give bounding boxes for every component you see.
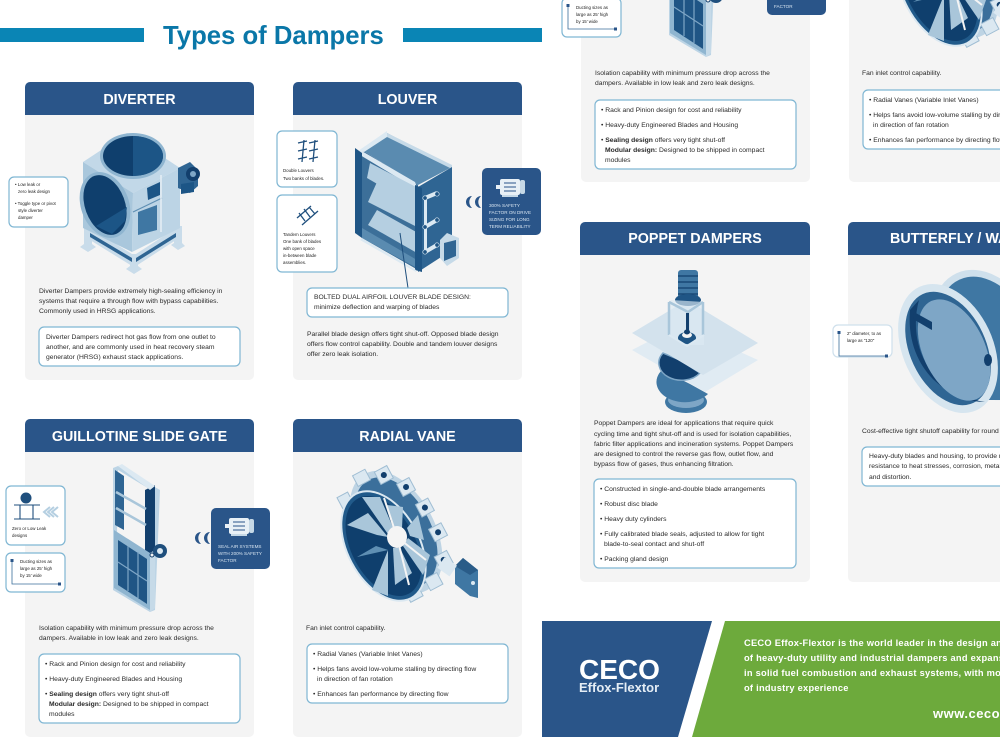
header: guillotine: GUILLOTINE SLIDE GATE	[52, 429, 227, 445]
callout: seal air systems	[195, 508, 270, 569]
footer: logo block: Effox-Flextor	[579, 680, 659, 695]
title with side bars	[0, 22, 542, 50]
callout: ducting size	[6, 553, 65, 592]
header: butterfly	[848, 222, 1000, 255]
callout: ducting size: Ducting sizes as	[20, 559, 53, 564]
text box: poppet features: • Heavy duty cylinders	[600, 516, 667, 523]
callout: bolted blade design: minimize deflection and warping of blades	[314, 304, 440, 311]
text: louver description	[307, 331, 499, 358]
text: radial vane description: Fan inlet control capability.	[306, 625, 386, 632]
callout: diverter features: damper	[18, 215, 33, 220]
text box: guillotine features (repeat): • Sealing design offers very tight shut-off	[601, 137, 725, 144]
text box: poppet features: blade-to-seal contact and shut-off	[604, 541, 704, 548]
text: diverter description: systems that require a through flow with bypass capabilities.	[39, 298, 218, 305]
text box: radial vane features: in direction of fan rotation	[317, 676, 393, 683]
callout: bolted blade design	[307, 288, 508, 317]
header: diverter	[25, 82, 254, 115]
callout: safety factor	[466, 168, 541, 235]
text box: butterfly notes	[862, 447, 1000, 486]
panel: guillotine slide gate (upper right, cropped)	[562, 0, 826, 182]
title with side bars: Types of Dampers	[163, 22, 384, 50]
text box: butterfly notes: and distortion.	[869, 474, 912, 481]
header: radial vane: RADIAL VANE	[359, 429, 456, 445]
text: guillotine description: Isolation capability with minimum pressure drop across the	[39, 625, 214, 632]
callout: double louvers: Double Louvers	[283, 168, 315, 173]
callout: diverter features	[9, 177, 68, 227]
text box: guillotine features: Modular design: Designed to be shipped in compact	[49, 701, 209, 708]
text box: radial vane features: • Enhances fan performance by directing flow	[313, 691, 449, 698]
text box: guillotine features	[39, 654, 240, 723]
panel: guillotine slide gate	[6, 419, 270, 737]
panel: louver	[277, 82, 541, 380]
illustration: slide gate (cropped)	[669, 0, 723, 57]
text box: diverter notes: another, and are commonly used in heat recovery steam	[46, 344, 215, 351]
callout: diameter range: 2" diameter, to as	[847, 331, 882, 336]
text box: guillotine features: • Heavy-duty Engineered Blades and Housing	[45, 676, 182, 683]
text: diverter description: Commonly used in HRSG applications.	[39, 308, 156, 315]
text: diverter description	[39, 288, 223, 315]
text box: radial vane features (repeat): in direction of fan rotation	[873, 122, 949, 129]
text box: guillotine features (repeat): • Rack and Pinion design for cost and reliability	[601, 107, 742, 114]
text box: poppet features: • Robust disc blade	[600, 501, 658, 508]
header: poppet dampers	[580, 222, 810, 255]
text: diverter description: Diverter Dampers provide extremely high-sealing efficiency in	[39, 288, 223, 295]
callout: zero or low leak: Zero or Low Leak	[12, 526, 47, 531]
callout: seal air systems: SEAL AIR SYSTEMS	[218, 544, 262, 549]
footer: company description: of industry experience	[744, 683, 849, 693]
illustration: radial vane (cropped)	[879, 0, 1000, 61]
panel: poppet dampers	[580, 222, 810, 582]
callout: diverter features: • Toggle type or pivot	[15, 201, 57, 206]
callout: tandem louvers: with open space	[283, 246, 315, 251]
callout: seal air systems: WITH 200% SAFETY	[218, 551, 262, 556]
text: guillotine description	[39, 625, 214, 642]
illustration: radial vane	[323, 450, 478, 616]
panel: radial vane (upper right, cropped)	[849, 0, 1000, 182]
text box: radial vane features	[307, 644, 508, 703]
text box: guillotine features (repeat): • Heavy-duty Engineered Blades and Housing	[601, 122, 738, 129]
callout: zero or low leak	[6, 486, 65, 545]
illustration: butterfly damper	[878, 252, 1000, 429]
text: guillotine description (repeat)	[595, 70, 770, 87]
callout: seal air systems: FACTOR	[218, 558, 237, 563]
header: guillotine	[25, 419, 254, 452]
header: louver	[293, 82, 522, 115]
text: louver description: offers flow control capability. Double and tandem louver designs	[307, 341, 498, 348]
text box: guillotine features (repeat)	[595, 100, 796, 169]
illustration: diverter damper	[71, 133, 200, 274]
callout: ducting size (cropped): Ducting sizes as	[576, 5, 609, 10]
text box: guillotine features: modules	[49, 711, 75, 718]
text: guillotine description: dampers. Available in low leak and zero leak designs.	[39, 635, 199, 642]
text: poppet description: are designed to control the reverse gas flow, outlet flow, and	[594, 451, 774, 458]
callout: ducting size (cropped): by 15' wide	[576, 19, 598, 24]
header: radial vane	[293, 419, 522, 452]
callout: safety factor: SIZING FOR LONG	[489, 217, 530, 222]
text box: guillotine features: • Sealing design offers very tight shut-off	[45, 691, 169, 698]
text: guillotine description (repeat): dampers. Available in low leak and zero leak designs.	[595, 80, 755, 87]
callout: ducting size (cropped)	[562, 0, 621, 37]
callout: tandem louvers	[277, 195, 337, 272]
text: poppet description	[594, 420, 794, 468]
text box: diverter notes	[39, 327, 240, 366]
callout: tandem louvers: in-between blade	[283, 253, 317, 258]
callout: tandem louvers: One bank of blades	[283, 239, 322, 244]
callout: ducting size (cropped): large as 25' high	[576, 12, 609, 17]
text: louver description: offer zero leak isolation.	[307, 351, 378, 358]
text: poppet description: bypass flow of gases, thus enhancing filtration.	[594, 461, 734, 468]
text: poppet description: Poppet Dampers are ideal for applications that require quick	[594, 420, 774, 427]
callout: zero or low leak: designs	[12, 533, 28, 538]
text box: guillotine features (repeat): modules	[605, 157, 631, 164]
text box: radial vane features (repeat): • Radial Vanes (Variable Inlet Vanes)	[869, 97, 979, 104]
text box: radial vane features: • Helps fans avoid low-volume stalling by directing flow	[313, 666, 476, 673]
footer: logo block: CECO	[579, 654, 660, 685]
footer: company description	[692, 621, 1000, 737]
callout: bolted blade design: BOLTED DUAL AIRFOIL LOUVER BLADE DESIGN:	[314, 294, 471, 301]
panel: diverter	[9, 82, 254, 380]
text box: guillotine features: • Rack and Pinion design for cost and reliability	[45, 661, 186, 668]
text box: poppet features	[594, 479, 796, 568]
text box: poppet features: • Fully calibrated blade seals, adjusted to allow for tight	[600, 531, 764, 538]
callout: safety factor: TERM RELIABILITY	[489, 224, 531, 229]
text box: poppet features: • Packing gland design	[600, 556, 669, 563]
callout: double louvers	[277, 131, 337, 187]
text box: poppet features: • Constructed in single-and-double blade arrangements	[600, 486, 766, 493]
callout: diverter features: zero leak design	[18, 189, 51, 194]
illustration: slide gate	[113, 464, 167, 612]
header: poppet dampers: POPPET DAMPERS	[628, 231, 762, 247]
callout: seal air systems (cropped): FACTOR	[774, 4, 793, 9]
footer: logo block	[542, 621, 712, 737]
illustration: poppet damper	[632, 270, 758, 413]
callout: safety factor: FACTOR ON DRIVE	[489, 210, 531, 215]
callout: ducting size: by 15' wide	[20, 573, 42, 578]
header: diverter: DIVERTER	[103, 92, 176, 108]
header: louver: LOUVER	[378, 92, 438, 108]
callout: ducting size: large as 25' high	[20, 566, 53, 571]
callout: tandem louvers: assemblies.	[283, 260, 306, 265]
text: guillotine description (repeat): Isolation capability with minimum pressure drop across the	[595, 70, 770, 77]
text box: radial vane features: • Radial Vanes (Variable Inlet Vanes)	[313, 651, 423, 658]
panel: radial vane	[293, 419, 522, 737]
text: poppet description: fabric filter applications and incineration systems. Poppet Dampers	[594, 441, 794, 448]
text: louver description: Parallel blade design offers tight shut-off. Opposed blade design	[307, 331, 499, 338]
callout: diameter range: large as "120"	[847, 338, 875, 343]
text box: guillotine features (repeat): Modular design: Designed to be shipped in compact	[605, 147, 765, 154]
panel: butterfly / wafer	[833, 222, 1000, 582]
callout: diameter range	[833, 325, 892, 358]
callout: diverter features: style diverter	[18, 208, 43, 213]
text: radial vane description (repeat): Fan inlet control capability.	[862, 70, 942, 77]
illustration: louver damper	[355, 131, 459, 288]
callout: diverter features: • Low leak or	[15, 182, 41, 187]
text box: diverter notes: generator (HRSG) exhaust stack applications.	[46, 354, 183, 361]
callout: double louvers: Two banks of blades.	[283, 176, 324, 181]
text: poppet description: cycling time and tight shut-off and is used for isolation capabilities,	[594, 431, 791, 438]
callout: seal air systems (cropped)	[767, 0, 826, 15]
text box: diverter notes: Diverter Dampers redirect hot gas flow from one outlet to	[46, 334, 216, 341]
callout: tandem louvers: Tandem Louvers	[283, 232, 316, 237]
callout: safety factor: 300% SAFETY	[489, 203, 520, 208]
text box: radial vane features (repeat)	[863, 90, 1000, 149]
